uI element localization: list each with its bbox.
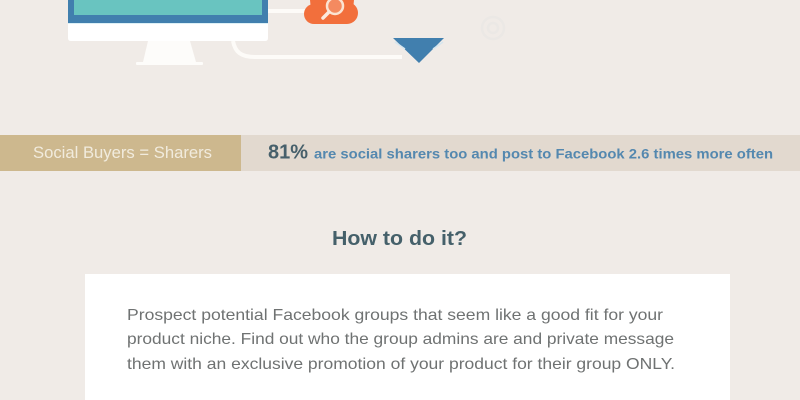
icon: blue down arrow — [393, 38, 444, 63]
panel: instructions: Prospect potential Facebook groups that seem like a good fit for your — [127, 307, 664, 324]
banner: statistic — [241, 135, 800, 171]
heading: how to do it: How to do it? — [332, 228, 467, 250]
banner: social buyers label — [0, 135, 241, 171]
banner: statistic: are social sharers too and post to Facebook 2.6 times more often — [314, 146, 773, 162]
panel: instructions: them with an exclusive promotion of your product for their group ONLY. — [127, 356, 675, 373]
panel: instructions — [85, 274, 730, 400]
banner: statistic: 81% — [268, 142, 308, 164]
icon: orange cloud with magnifier — [304, 0, 358, 24]
connector: monitor to cloud — [268, 9, 308, 13]
banner: social buyers label: Social Buyers = Sharers — [33, 143, 212, 162]
panel: instructions: product niche. Find out who the group admins are and private message — [127, 331, 674, 348]
icon: faint registered mark — [482, 17, 504, 39]
connector: monitor to arrow — [233, 41, 402, 57]
icon: desktop monitor — [68, 0, 268, 65]
